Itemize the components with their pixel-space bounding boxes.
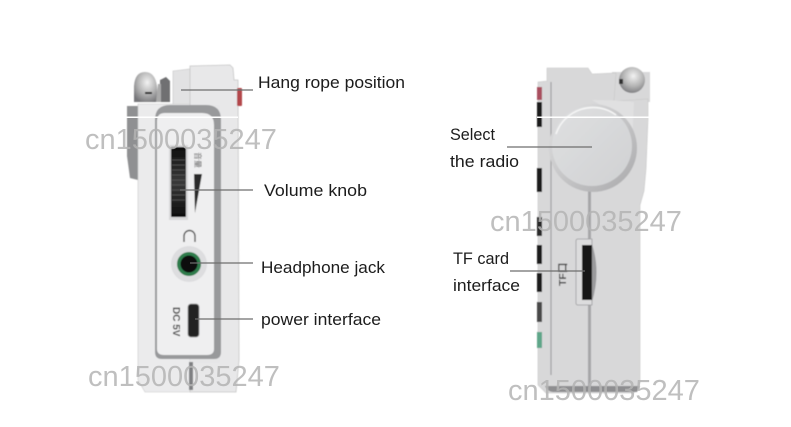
label: interface: interface xyxy=(453,277,520,295)
leader line: volume xyxy=(180,189,253,191)
watermark top right: cn1500035247 xyxy=(490,206,682,238)
headphone icon xyxy=(184,230,195,242)
front body xyxy=(138,104,190,392)
leader line: headphone xyxy=(190,262,253,264)
white line right xyxy=(537,116,653,118)
label: power interface: power interface xyxy=(261,311,381,329)
watermark bottom left: cn1500035247 xyxy=(88,361,280,393)
bottom seam xyxy=(189,362,193,390)
label: select: Select xyxy=(450,125,495,144)
label: TF card: TF card xyxy=(453,249,509,268)
DC 5V label: DC 5V xyxy=(170,307,181,337)
red side button xyxy=(237,88,242,106)
USB port xyxy=(188,304,199,337)
leader line: select radio xyxy=(507,146,592,148)
left device: radio side view xyxy=(127,65,242,392)
volume wheel xyxy=(169,145,188,220)
label: hang rope position: Hang rope position xyxy=(258,74,405,92)
side buttons xyxy=(537,87,542,348)
center seam xyxy=(588,190,591,392)
label: the radio: the radio xyxy=(450,153,519,171)
main body xyxy=(538,68,648,393)
recessed control panel xyxy=(155,105,221,359)
watermark top left: cn1500035247 xyxy=(85,124,277,156)
watermark bottom right: cn1500035247 xyxy=(508,375,700,407)
right device: radio side view xyxy=(537,67,650,393)
upper recess xyxy=(592,100,634,146)
leader line: power xyxy=(195,318,253,320)
volume markings xyxy=(193,152,203,213)
leader line: TF card xyxy=(510,270,585,272)
leader line: hang rope xyxy=(181,89,253,91)
white line left xyxy=(125,116,238,118)
bottom edge xyxy=(545,386,640,392)
TF label: TF口 xyxy=(557,263,569,286)
rear housing xyxy=(190,65,239,392)
volume markings: 音量 xyxy=(193,152,203,168)
headphone jack xyxy=(171,246,207,282)
selector knob xyxy=(549,104,637,192)
panel lines xyxy=(550,82,552,375)
top small knob xyxy=(612,67,650,102)
antenna knob xyxy=(134,72,170,102)
label: volume knob: Volume knob xyxy=(264,182,367,200)
grey side strip xyxy=(127,106,138,180)
TF card slot xyxy=(576,239,596,305)
top housing step xyxy=(173,69,190,105)
label: headphone jack: Headphone jack xyxy=(261,259,386,277)
